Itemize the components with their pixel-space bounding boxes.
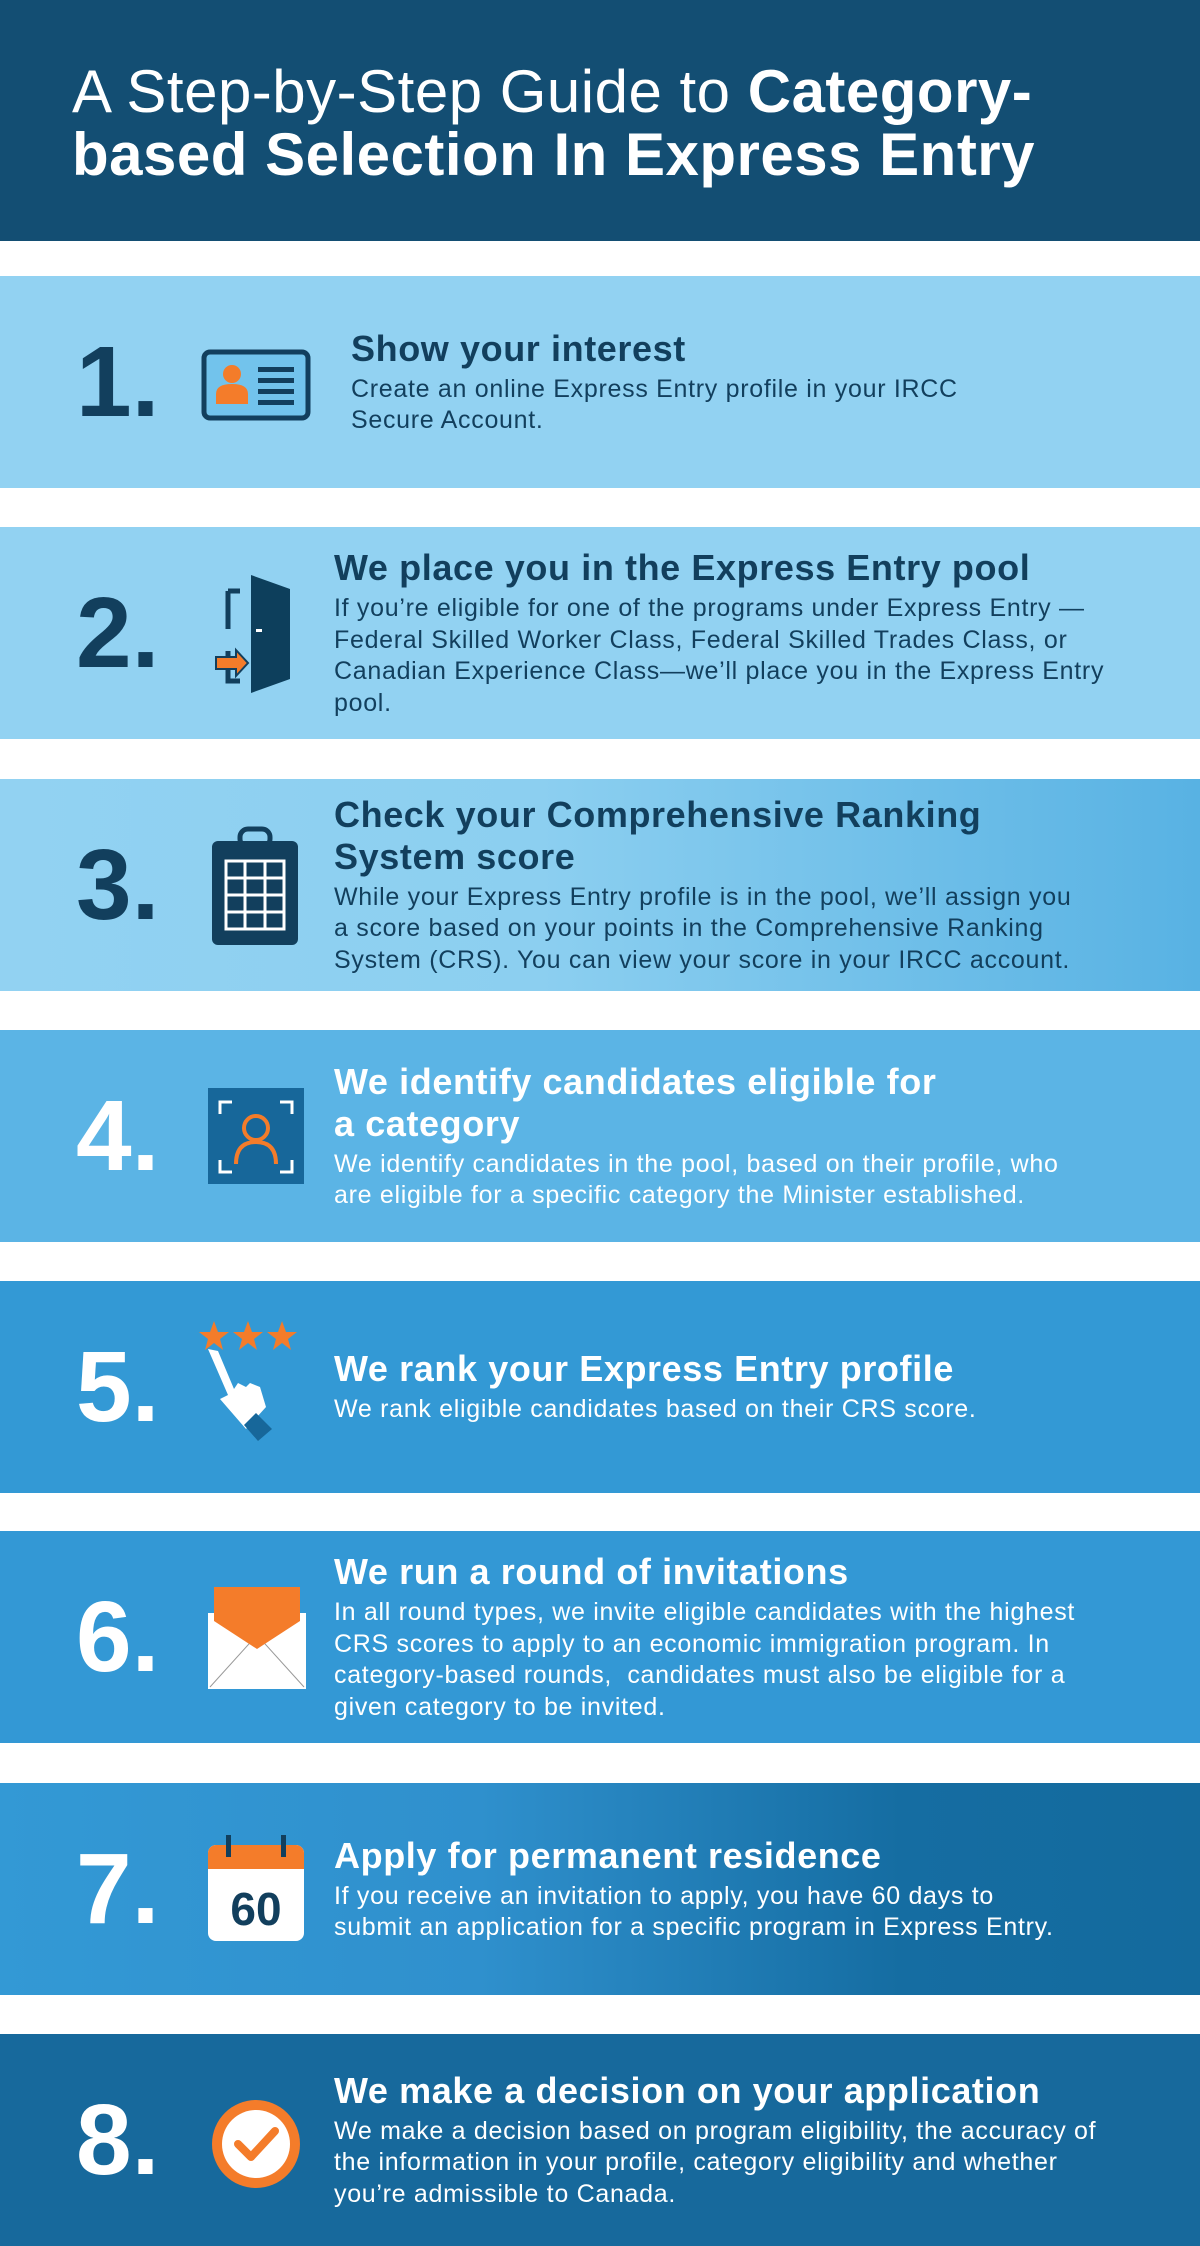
number 4: 4. [76,1080,159,1192]
icon: envelope [208,1587,306,1689]
panel: step 2 [0,527,1200,739]
icon: calendar 60 [208,1835,304,1941]
text: step 4: We identify candidates eligible for [334,1060,936,1102]
icon: clipboard [212,826,298,945]
text: step 7: submit an application for a specific program in Express Entry. [334,1913,1054,1941]
icon: door [215,575,290,693]
text: step 2: Canadian Experience Class—we’ll place you in the Express Entry [334,657,1104,685]
text: step 8: the information in your profile, category eligibility and whether [334,2148,1058,2176]
title [0,0,1200,241]
number 5: 5. [76,1330,159,1442]
icon: hand with stars [199,1321,297,1441]
number 2: 2. [76,576,159,688]
text: step 6: given category to be invited. [334,1692,666,1720]
text: step 6: We run a round of invitations [334,1551,849,1592]
text: step 4: are eligible for a specific category the Minister established. [334,1181,1025,1209]
panel: step 7 [0,1783,1200,1995]
text: step 8 [334,2070,1096,2208]
text: step 1: Secure Account. [351,406,544,434]
text: step 7: If you receive an invitation to apply, you have 60 days to [334,1882,994,1910]
title: A Step-by-Step Guide to Category- [72,58,1032,125]
text: step 6: CRS scores to apply to an economic immigration program. In [334,1630,1050,1658]
panel: step 8 [0,2034,1200,2246]
text: step 3 [334,794,1071,974]
text: step 2 [334,547,1104,716]
panel: step 4 [0,1030,1200,1242]
panel: step 1 [0,276,1200,488]
text: step 2: If you’re eligible for one of the programs under Express Entry — [334,594,1085,622]
text: step 6: In all round types, we invite eligible candidates with the highest [334,1598,1075,1626]
text: step 2: pool. [334,688,392,716]
number 1: 1. [76,326,159,438]
icon: checkmark circle [212,2100,300,2188]
text: step 6: category-based rounds, candidates must also be eligible for a [334,1661,1065,1689]
text: step 1 [351,328,958,434]
text: step 1: Create an online Express Entry profile in your IRCC [351,374,958,402]
text: step 7 [334,1834,1054,1941]
number 6: 6. [76,1580,159,1692]
text: step 4: a category [334,1102,520,1144]
text: step 4: We identify candidates in the pool, based on their profile, who [334,1150,1059,1178]
number 7: 7. [76,1832,159,1944]
number 3: 3. [76,828,159,940]
text: step 7: Apply for permanent residence [334,1834,882,1876]
panel: step 3 [0,779,1200,991]
text: step 8: We make a decision based on program eligibility, the accuracy of [334,2117,1096,2145]
text: step 3: a score based on your points in the Comprehensive Ranking [334,914,1044,942]
panel: step 6 [0,1531,1200,1743]
text: step 3: While your Express Entry profile is in the pool, we’ll assign you [334,883,1071,911]
text: step 1: Show your interest [351,328,686,368]
panel: step 5 [0,1281,1200,1493]
text: step 4 [334,1060,1059,1209]
number 8: 8. [76,2084,159,2196]
title: based Selection In Express Entry [72,121,1035,188]
text: step 5: We rank eligible candidates based on their CRS score. [334,1395,977,1423]
text: step 2: Federal Skilled Worker Class, Federal Skilled Trades Class, or [334,626,1067,654]
icon: id card [202,350,310,420]
text: step 3: System score [334,836,575,877]
text: step 5: We rank your Express Entry profile [334,1348,954,1389]
text: step 3: Check your Comprehensive Ranking [334,794,981,835]
text: step 3: System (CRS). You can view your score in your IRCC account. [334,946,1070,974]
text: step 6 [334,1551,1075,1720]
text: step 5 [334,1348,977,1423]
text: step 8: you’re admissible to Canada. [334,2180,676,2208]
text: step 8: We make a decision on your application [334,2070,1040,2111]
icon: calendar 60: 60 [230,1883,282,1935]
text: step 2: We place you in the Express Entry pool [334,547,1030,588]
icon: person focus [208,1088,304,1184]
